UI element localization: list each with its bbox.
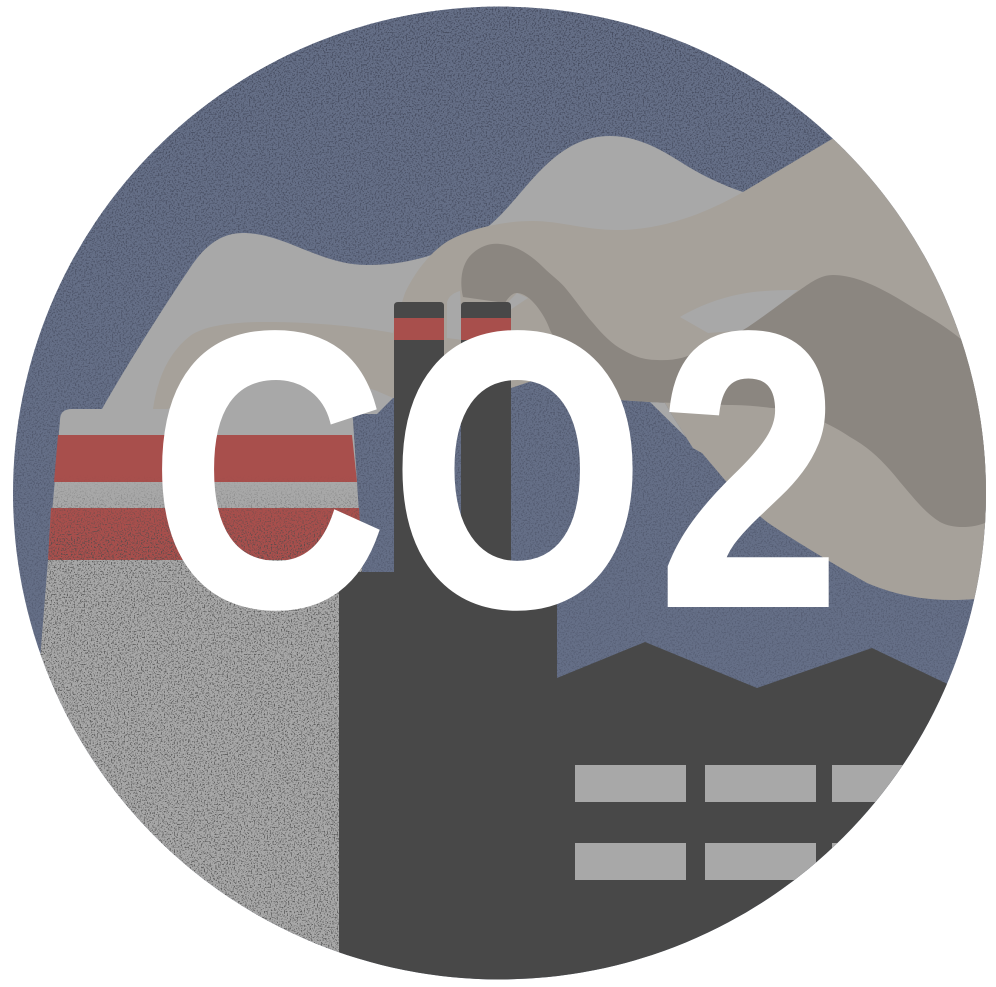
smoke: beige cloud xyxy=(153,139,996,600)
smoke: dark plume xyxy=(461,244,996,527)
tower grain xyxy=(40,482,362,958)
left chimney xyxy=(394,302,444,575)
factory windows xyxy=(575,765,902,880)
cooling tower xyxy=(40,409,362,960)
smoke: grey gap between plumes xyxy=(680,290,798,333)
factory building xyxy=(339,572,960,987)
title: CO2: CO2 xyxy=(151,252,839,687)
smoke: grey wedge at chimney mouth xyxy=(508,293,528,309)
smoke: grey sliver along lower plume xyxy=(650,402,702,453)
smoke: light grey cloud xyxy=(102,136,800,414)
smoke: grey patch between chimneys xyxy=(447,291,461,340)
tower red stripes xyxy=(48,435,362,560)
right chimney xyxy=(461,302,511,575)
